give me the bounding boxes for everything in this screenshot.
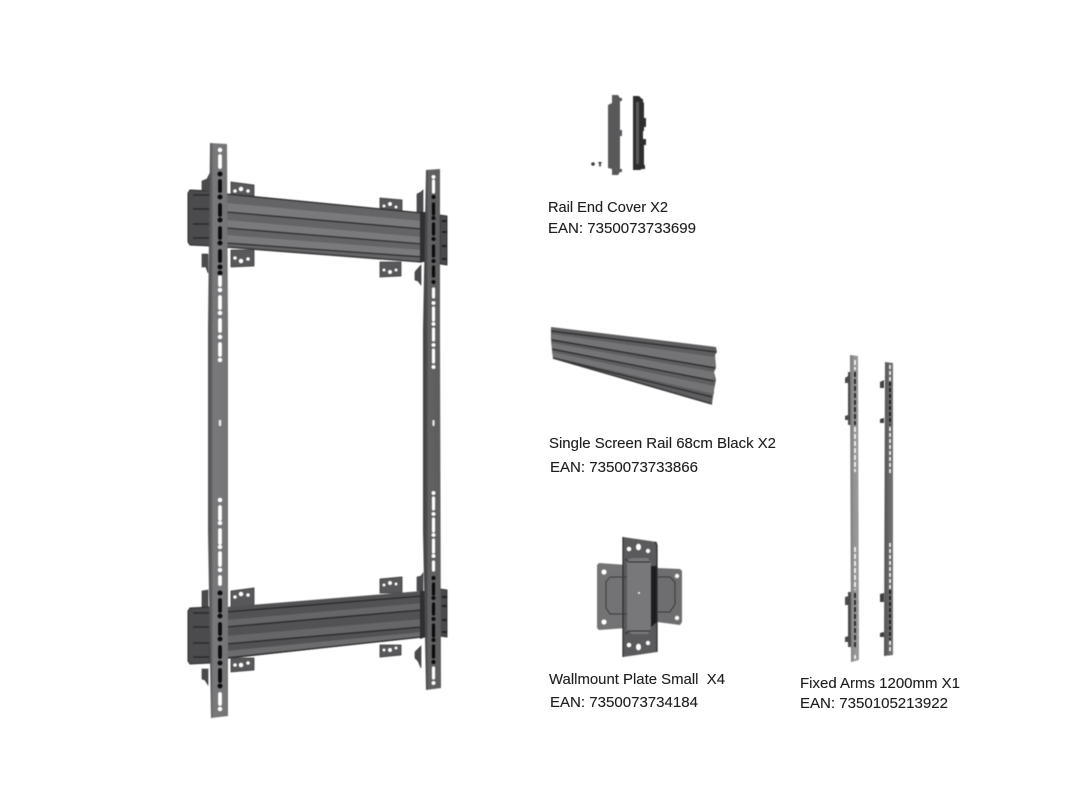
label: wallmount plate: Wallmount Plate Small X4	[549, 671, 725, 688]
ean: fixed arms: EAN: 7350105213922	[800, 695, 948, 712]
icon: rail end cover parts	[591, 95, 646, 175]
right end covers	[420, 212, 426, 639]
label: fixed arms: Fixed Arms 1200mm X1	[800, 675, 960, 692]
icon: fixed arm left	[845, 355, 859, 662]
label: rail end cover: Rail End Cover X2	[548, 199, 668, 216]
left end covers	[188, 190, 210, 664]
icon: rail	[551, 327, 717, 404]
bottom rail	[226, 591, 422, 659]
left arm white holes	[218, 156, 222, 704]
top rail mounting tabs	[231, 182, 402, 672]
item: fixed arms	[800, 355, 960, 712]
top rail	[226, 194, 422, 262]
item: rail end cover	[548, 95, 696, 237]
item: single screen rail	[549, 327, 776, 476]
right arm black holes	[432, 197, 436, 662]
left arm	[208, 143, 228, 718]
right arm white holes	[432, 181, 435, 678]
label: single screen rail: Single Screen Rail 68cm Black X2	[549, 435, 776, 452]
left arm black holes	[218, 174, 223, 686]
assembled mount	[188, 143, 447, 718]
ean: single screen rail: EAN: 7350073733866	[550, 459, 698, 476]
icon: fixed arm right	[880, 362, 893, 656]
tab holes	[233, 187, 398, 667]
ean: rail end cover: EAN: 7350073733699	[548, 220, 696, 237]
ean: wallmount plate: EAN: 7350073734184	[550, 694, 698, 711]
item: wallmount plate	[549, 537, 725, 711]
icon: wallmount plate	[597, 537, 682, 657]
arm hooks	[202, 173, 423, 685]
right arm	[423, 169, 441, 690]
